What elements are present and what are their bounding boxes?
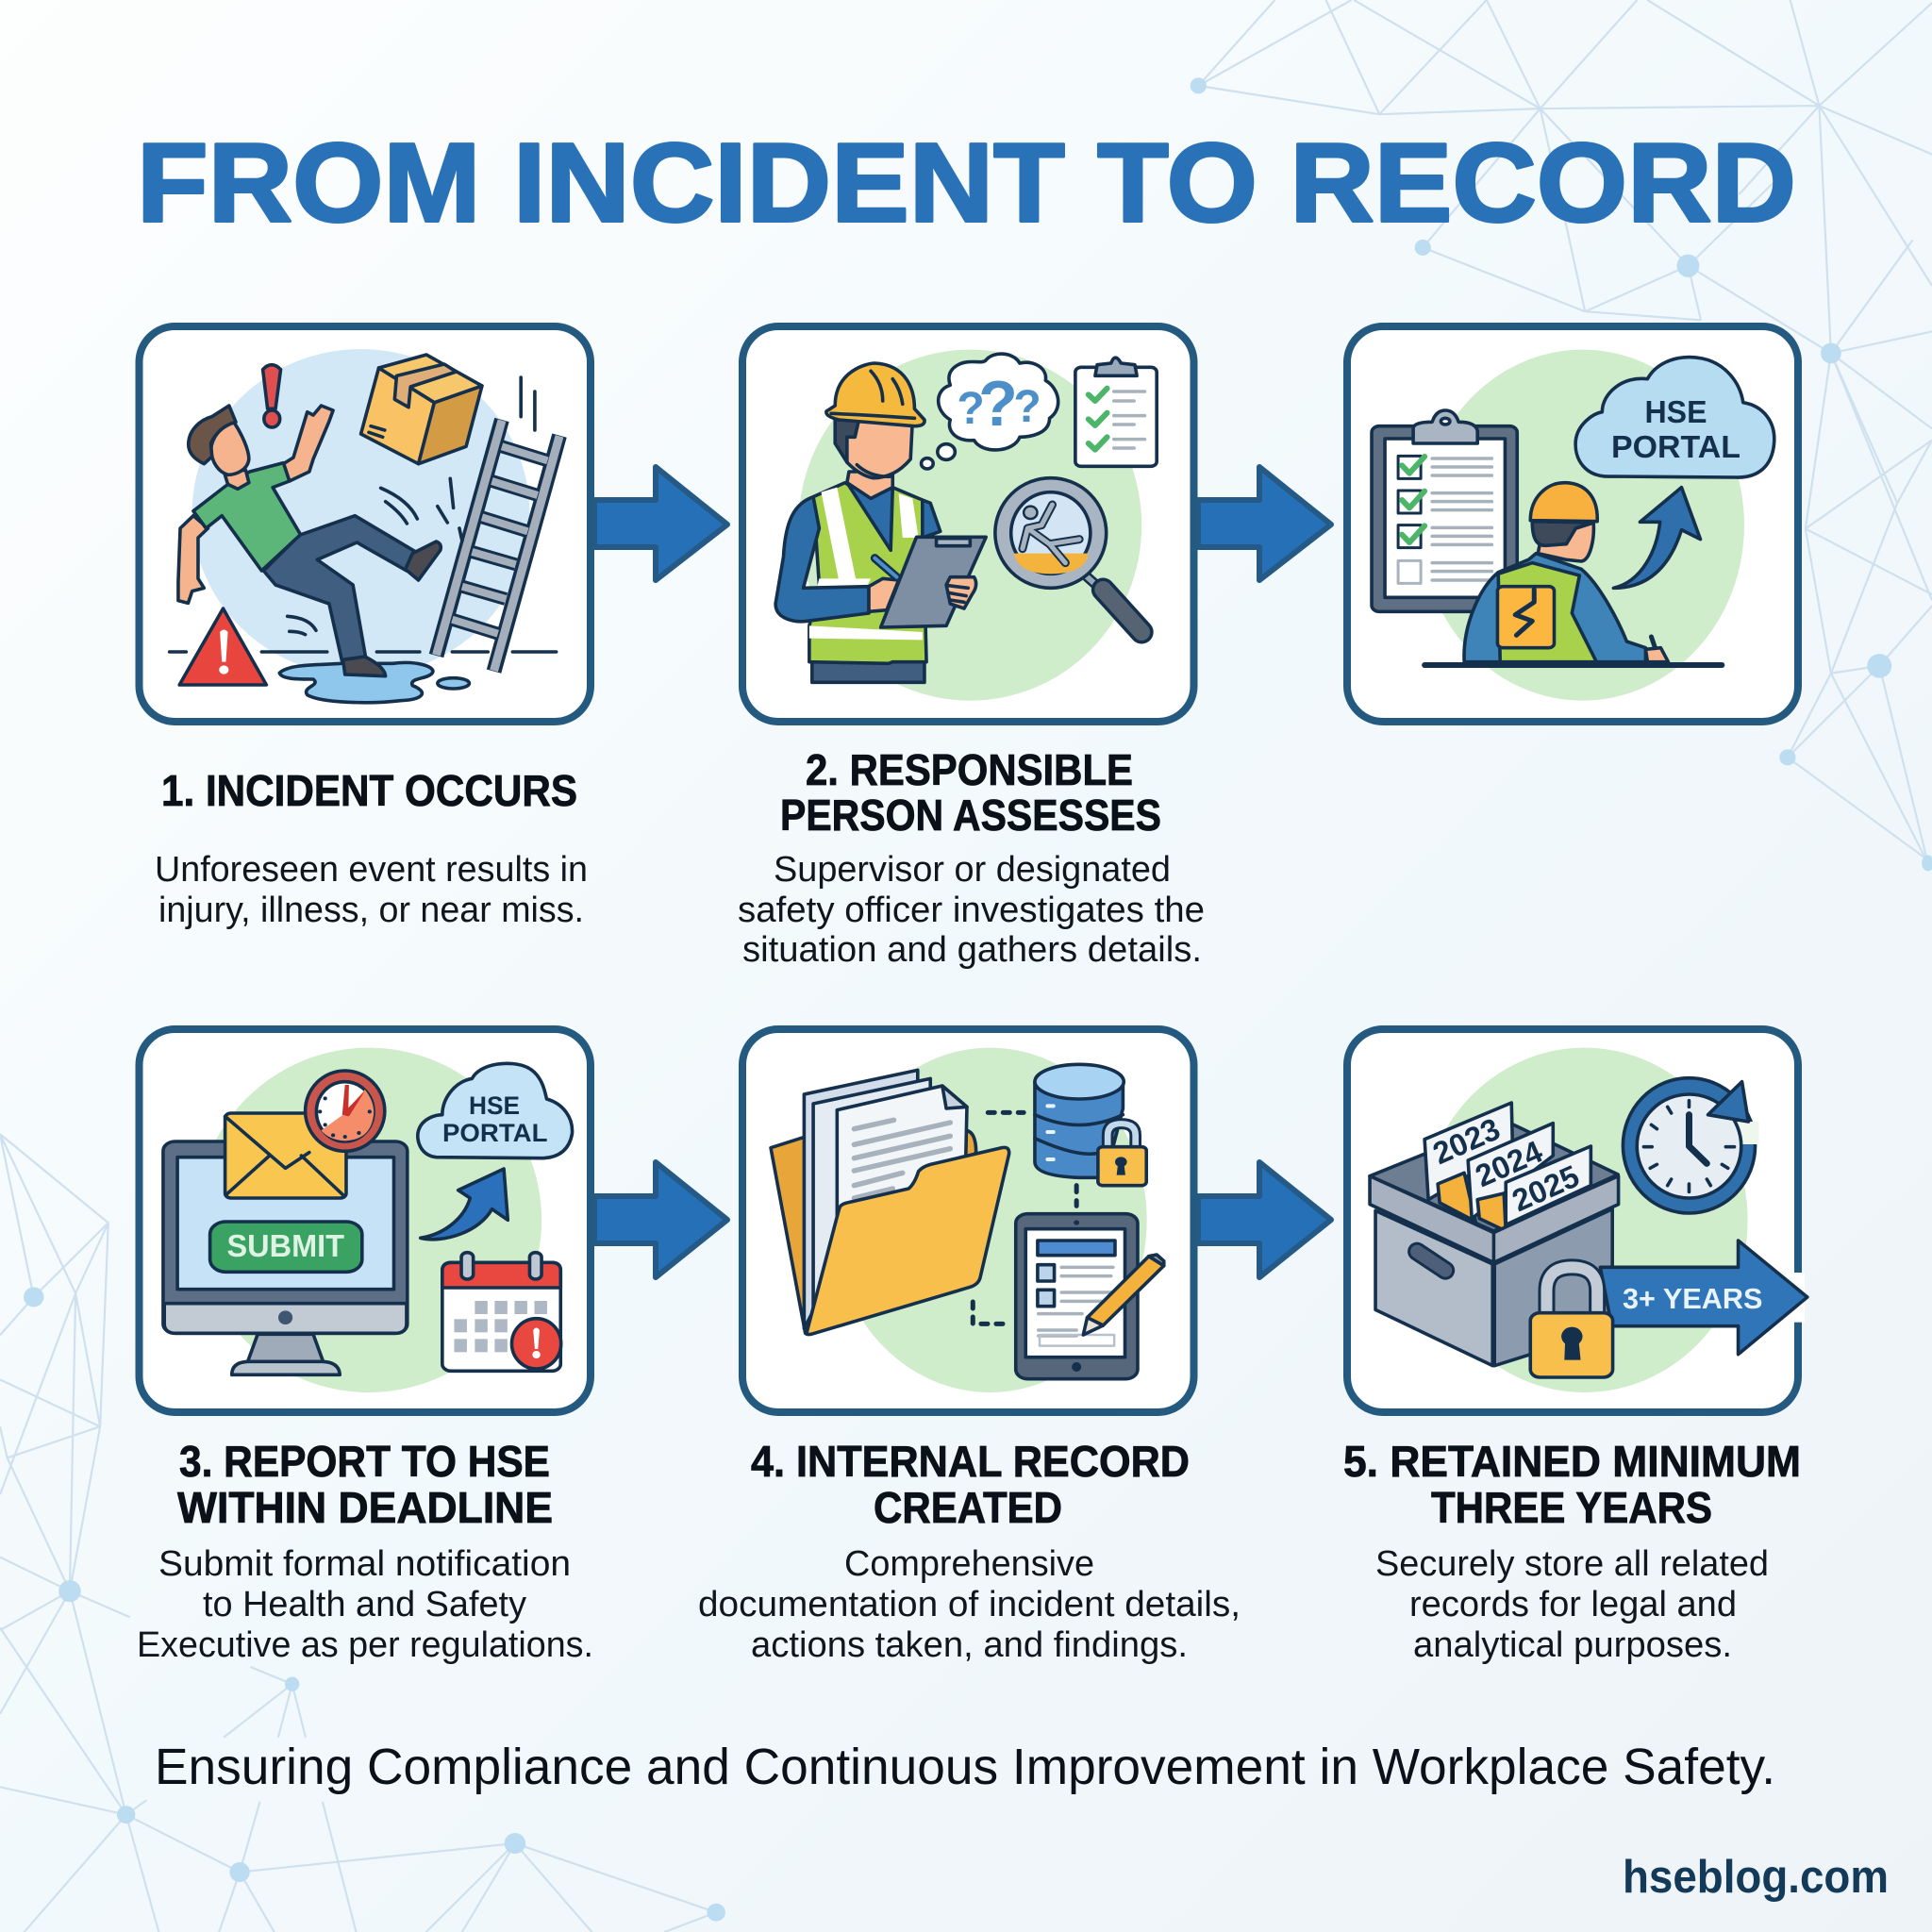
icon: monitor with envelope, deadline clock, portal and calendar <box>163 1048 573 1392</box>
icon: worker filling checklist to HSE portal <box>1372 350 1774 701</box>
text: step 5 description: Securely store all related <box>1375 1544 1769 1584</box>
text: step 2 description <box>738 850 1205 970</box>
arrow: step 4 to step 5 <box>1198 1162 1331 1277</box>
panel: step 5 retained minimum three years <box>1343 1029 1807 1665</box>
text: step 3 description: to Health and Safety <box>203 1585 526 1624</box>
icon: archive box, clock, padlock and 3+ years arrow <box>1370 1048 1807 1392</box>
text: step 5 description: records for legal and <box>1409 1585 1737 1624</box>
text: step 4 description: documentation of incident details, <box>698 1585 1241 1624</box>
labels: year cards: 2023 <box>1427 1111 1505 1171</box>
heading: step 4: 4. INTERNAL RECORD <box>751 1437 1190 1486</box>
heading: step 2: PERSON ASSESSES <box>780 791 1161 840</box>
text: step 3 description <box>137 1544 593 1665</box>
text: step 4 description: actions taken, and findings. <box>751 1625 1188 1665</box>
icon: question marks: ? <box>957 384 985 434</box>
heading: step 3: 3. REPORT TO HSE <box>179 1437 550 1486</box>
text: step 4 description: Comprehensive <box>844 1544 1094 1584</box>
icon: safety officer with clipboard and magnifier <box>775 350 1157 701</box>
footer: site name: hseblog.com <box>1623 1852 1889 1903</box>
arrow: step 1 to step 2 <box>594 467 727 580</box>
title: FROM INCIDENT TO RECORD <box>137 121 1796 245</box>
icon: question marks <box>957 368 1041 440</box>
icon: question marks: ? <box>978 368 1018 440</box>
text: step 5 description <box>1375 1544 1769 1665</box>
icon: folder, database and tablet <box>771 1048 1164 1392</box>
labels: year cards: 2025 <box>1507 1158 1584 1218</box>
tagline: Ensuring Compliance and Continuous Improvement in Workplace Safety. <box>155 1739 1775 1795</box>
text: step 2 description: Supervisor or designated <box>774 850 1171 890</box>
heading: step 4: CREATED <box>874 1483 1062 1532</box>
heading: step 5 <box>1343 1437 1801 1532</box>
icon: HSE portal cloud label: HSE <box>1645 394 1707 429</box>
panel: step 4 internal record <box>698 1029 1241 1665</box>
heading: step 3 <box>177 1437 553 1532</box>
arrow: step 3 to step 4 <box>594 1162 727 1277</box>
heading: step 4 <box>751 1437 1190 1532</box>
icon: HSE portal cloud label <box>1611 394 1740 464</box>
panel: step 1 incident occurs <box>140 326 591 930</box>
text: step 3 description: Executive as per regulations. <box>137 1625 593 1665</box>
text: step 1 description: Unforeseen event results in <box>155 850 588 890</box>
heading: step 2 <box>780 745 1161 840</box>
heading: step 1: 1. INCIDENT OCCURS <box>161 766 577 815</box>
panel: step 2b checklist and portal <box>1347 326 1798 722</box>
labels: year cards: 2024 <box>1470 1133 1548 1193</box>
button: submit: SUBMIT <box>226 1228 344 1263</box>
icon: HSE portal cloud label <box>442 1091 547 1147</box>
text: step 1 description: injury, illness, or near miss. <box>158 891 584 930</box>
arrow: step 2 to step 3 <box>1198 467 1331 580</box>
panel: step 2 responsible person assesses <box>738 326 1205 970</box>
panel: step 3 report to HSE <box>137 1029 593 1665</box>
text: step 5 description: analytical purposes. <box>1413 1625 1732 1665</box>
text: step 1 description <box>155 850 588 930</box>
network pattern: bottom left <box>0 1134 725 1932</box>
text: step 2 description: safety officer investigates the <box>738 891 1205 930</box>
text: step 3 description: Submit formal notification <box>158 1544 571 1584</box>
text: step 2 description: situation and gathers details. <box>742 930 1202 970</box>
text: step 4 description <box>698 1544 1241 1665</box>
icon: falling worker, box, ladder and puddle <box>170 349 559 703</box>
heading: step 5: THREE YEARS <box>1431 1483 1712 1532</box>
icon: HSE portal cloud label: PORTAL <box>1611 429 1740 464</box>
heading: step 2: 2. RESPONSIBLE <box>806 745 1133 794</box>
heading: step 3: WITHIN DEADLINE <box>177 1483 553 1532</box>
labels: year cards <box>1427 1111 1584 1218</box>
label: 3+ years: 3+ YEARS <box>1623 1282 1762 1315</box>
icon: HSE portal cloud label: HSE <box>469 1091 520 1120</box>
icon: question marks: ? <box>1013 382 1041 432</box>
icon: HSE portal cloud label: PORTAL <box>442 1119 547 1147</box>
heading: step 5: 5. RETAINED MINIMUM <box>1343 1437 1801 1486</box>
network pattern: top right <box>1191 0 1932 871</box>
